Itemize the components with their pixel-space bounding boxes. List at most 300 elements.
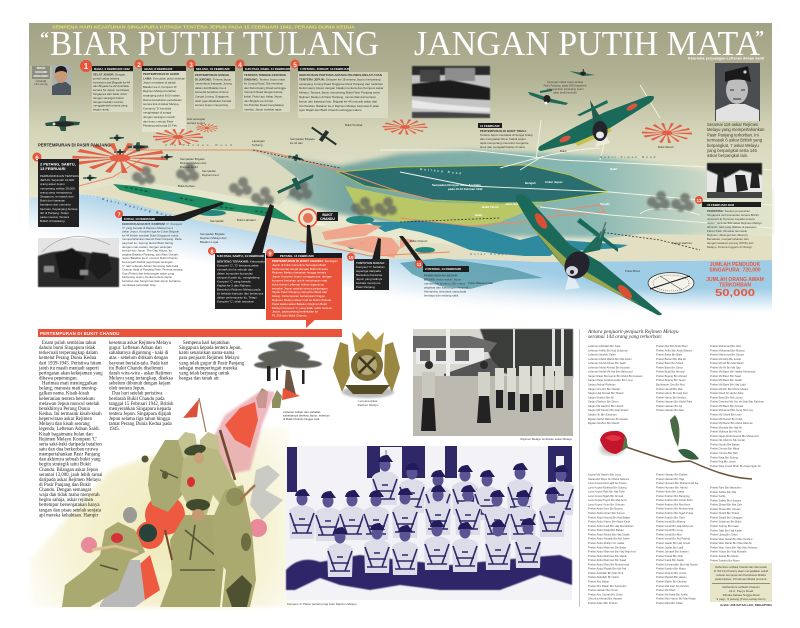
timeline 7 with leader: 'C' dari Leftenan Adnan Sempang hala bukit	[122, 264, 178, 268]
timeline 5: TENTERA JEPUN:	[299, 77, 325, 81]
map labels: Bukit Chandu	[410, 239, 428, 243]
timeline 9: Pada waktu askar Batalion Rejimen Bukit	[272, 302, 327, 306]
timeline 1: bersekutu dari Brigade ke-44	[93, 80, 131, 84]
timeline 6: PERBANDINGAN TENTERA	[40, 174, 79, 178]
timeline 10: Bersekutu bersama	[356, 273, 382, 277]
names column 3 upper: Prebet Md Din Bin Mohd Shukor	[710, 387, 749, 391]
names column 3 upper: Prebet Md Adip Bin Ismail	[710, 357, 741, 361]
article column 1: di Pasir Panjang dan Bukit	[39, 483, 91, 488]
article column 1: seramai 13,000, jauh lebih ramai	[39, 473, 103, 478]
names column 2 upper: Prebet Basri Bin Sirrat	[656, 365, 683, 369]
memorial info box: Reflections at Bukit Chandu	[722, 585, 760, 589]
names column 3 lower: Prebet Safian Bin Mat	[710, 490, 736, 494]
byline: suhaimi@	[36, 80, 47, 83]
names column 2 lower: Prebet Ismail Bin Maeng	[656, 520, 686, 524]
11 Februari note: Tentera Jepun mendarat di Sungei Kranji	[480, 133, 533, 137]
names column 1 upper: Sarjan Haji Ahmad Bin Shaari	[588, 391, 624, 395]
11 Februari note: 11 FEBRUARI	[480, 124, 500, 128]
names column 1 lower: Prebet Hassan Bin Omar	[588, 588, 618, 592]
article column 2: sebelum dibunuh dengan kejam	[109, 382, 171, 387]
names column 2 lower: Prebet Ibrahim Bin Ngah Putap	[656, 511, 694, 515]
map labels: Kampung Pasir Panjang	[40, 192, 71, 196]
names column 3 upper: Prebet Muhamad Bin Idris	[710, 344, 742, 348]
list heading	[587, 329, 679, 340]
article column 1: mempertahankan Pasir Panjang	[39, 453, 101, 458]
timeline 3: bersedia bertahan di timur	[195, 90, 229, 94]
article column 1: kemelut Perang Dunia Kedua	[39, 356, 97, 361]
timeline 9: hilang. Pertempuran berlanjutan hingga	[272, 294, 325, 298]
pink blood band	[180, 390, 275, 480]
teal reclaimed area	[368, 220, 628, 256]
article column 2: itu Bukit Chandu diselimuti	[109, 366, 164, 371]
article column 1: tangan dan pisau setelah senjata	[39, 508, 102, 513]
names column 3 upper: Prebet Raja Ismail Shah Bin Haja Ngah Ali	[710, 464, 761, 468]
section header bar: PERTEMPURAN DI BUKIT CHANDU	[40, 331, 120, 336]
timeline 7 with leader: membawa pertandan Gap.	[122, 283, 156, 287]
article column 1: melawan Jepun muncul setelah	[39, 402, 100, 407]
11 Februari note: PERTEMPURAN DI BUKIT TIMAH:	[480, 129, 527, 133]
names column 3 lower: Prebet Ujang Bin Shari	[710, 533, 738, 537]
timeline 3: Tentera Jepun	[212, 77, 231, 81]
timeline 11: pegawai dan kakitangan Hospital	[424, 286, 468, 290]
article column 1: api mereka kehabisan. Hampir	[39, 513, 99, 518]
list heading: Antara penjuarit-penjuarit Rejimen Melayu	[587, 329, 679, 335]
map labels: ke-44 dan	[290, 141, 303, 145]
11 Februari note	[478, 123, 533, 149]
timeline 8 with leader: Kompeni 'C' yang berada	[217, 280, 251, 284]
names column 3 upper: Prebet Basri Bin Md Loman	[710, 395, 743, 399]
forest strip	[113, 184, 296, 222]
timeline 11: membunuh seramai 200 orang	[424, 282, 465, 286]
timeline 10: 10	[348, 255, 354, 260]
timeline 5: 1 PETANG, JUMAAT, 13 FEBRUARI	[300, 67, 350, 71]
names column 3 upper: Prebet Dzamlat Md Nor bin Haji Mat Rahman	[710, 400, 764, 404]
timeline 2: Ramai kedudukan pertahanan	[143, 98, 182, 102]
timeline 7 with leader: Chandu tiada di Panjang Pasir. Peninta senjata	[122, 268, 183, 272]
illustration: soldiers in battle	[62, 390, 283, 607]
timeline 3: tentera Jepun menyerang	[195, 103, 228, 107]
grey shadows	[100, 560, 145, 607]
timeline 6: 6	[35, 156, 39, 162]
timeline 5: 5	[293, 62, 297, 69]
article column 1: galkan nama. Kisah-kisah	[39, 392, 90, 397]
timeline 1	[80, 60, 133, 112]
timeline 8 with leader: 8	[210, 250, 214, 256]
article column 1: daripada askar Rejimen Melayu	[39, 478, 101, 483]
names column 2 upper: Prebet Abd Bin Abdul Rani	[656, 344, 688, 348]
memorial info box: Reflections at Bukit Chandu dan Memorials	[715, 565, 767, 569]
map labels: Bukit Kerbau	[178, 184, 195, 188]
panel: map background: Bengah	[525, 181, 536, 185]
names column 3 upper: Prebet Md Sharif Bin Lean	[710, 412, 742, 416]
Adnan caption: Pasir Panjang terkorban. Ini	[707, 132, 759, 137]
plane: medium	[528, 90, 568, 105]
timeline 4: Ulu Pandan Road menghalang	[244, 103, 284, 107]
names column 3 upper: Prebet Puji Bin Jusoh	[710, 460, 736, 464]
map labels	[40, 117, 692, 285]
names column 2 lower: Prebet Ismail Bin Long	[656, 528, 684, 532]
section header bar	[38, 329, 342, 337]
parade caption: Rejimen Melayu lembaran askar Melayu	[520, 437, 572, 441]
timeline 10: Jepun yang tadinya	[356, 277, 382, 281]
timeline 2: dengan serangan musuh	[143, 115, 175, 119]
names column 2 upper: Prebet Bahari Bin Mat Ali	[656, 357, 686, 361]
timeline 6	[32, 152, 79, 227]
names column 2 lower: Prebet Jaafar Bin Latiff	[656, 545, 684, 549]
names column 2 lower: Prebet Mazlah Bin Hasan	[656, 575, 687, 579]
timeline 9: PERTEMPURAN DI BUKIT CHANDU:	[272, 259, 324, 263]
article column 2: menyerahkan Singapura kepada	[109, 407, 172, 412]
timeline 7 with leader: 7	[117, 212, 121, 218]
timeline 7 with leader: bertumpah ditebat juga Kapal serangan.	[122, 260, 174, 264]
names column 2 upper: Prebet Hassan Bin Aji	[656, 404, 682, 408]
article column 1: waja dan tidak mahu menyerah	[39, 493, 100, 498]
panel: map background: Kawasan	[312, 222, 325, 226]
timeline 7 with leader: ke-44 British terpisah Bukit Singapore untuk	[122, 233, 179, 237]
names column 3 upper: Prebet Md Basri Bin Haidar Mohamad	[710, 370, 756, 374]
photo: troops marching	[412, 66, 490, 118]
timeline 8 with leader: Kompeni 'C', 'D' bersama askar	[217, 264, 259, 268]
timeline 12: Melayu, Tentera Inggeris di Changi.	[707, 245, 753, 249]
map labels: Lapangan	[252, 139, 265, 143]
badge caption	[358, 399, 379, 407]
timeline 8 with leader: sampai di pasir itu, menghalang	[217, 276, 260, 280]
names column 3 lower: Prebet Zainal Bin Manis	[710, 554, 739, 558]
timeline 4	[236, 60, 290, 112]
timeline 9: Jepun di bukit menerima Serangan Bukit	[272, 263, 326, 267]
timeline 4: kebal. Pukul api, Askar Jepun	[244, 94, 282, 98]
map labels: Bukit	[560, 149, 567, 153]
names column 1 upper: Sarjan Mejar Bunyamin Bin Abdul Bin Hassan	[588, 374, 643, 378]
panel: map background: Bukit	[610, 167, 617, 171]
article column 2: gugur. Leftenan Adnan dan	[109, 346, 162, 351]
names column 3 upper: Prebet Md Basri Bin Haji Lajid	[710, 383, 746, 387]
timeline 3: SELASA, 10 FEBRUARI	[196, 67, 230, 71]
badge caption: Lencana Askar	[358, 399, 378, 403]
timeline 4: 4	[238, 62, 242, 69]
timeline 12: dengan tawanan perang (POW) dari	[707, 241, 754, 245]
timeline 6: orang askar Jepun	[40, 182, 65, 186]
timeline 11: Alexandra, termasuk yang tiada	[424, 290, 467, 294]
timeline 9: PL 236 iaitu Bukit Chandu.	[272, 314, 308, 318]
title	[40, 24, 764, 63]
plane: small top	[569, 69, 595, 76]
byline	[30, 66, 52, 95]
timeline 7 with leader: mempertahankan daerah Pasir Panjang. Pada	[122, 237, 182, 241]
soldier left falling	[62, 507, 157, 607]
timeline 9: Jepun Kompeni Jepun menggempur, dengan	[272, 275, 332, 279]
timeline 12: Singapura oleh komander tentera British	[707, 213, 759, 217]
names column 1 lower: Nasarudin Bujur bin Abdul Sabram	[588, 477, 630, 481]
names column 3 upper: Prebet Md Basri Bin Ahmad	[710, 404, 744, 408]
map labels: Sempadan	[202, 169, 216, 173]
names column 1 upper: Bgatan Ibrahim Bin Marah	[588, 421, 620, 425]
timeline 6: 13 FEBRUARI	[40, 166, 66, 171]
article column 3: Sempena hari kejatuhan	[183, 341, 230, 346]
second officer	[477, 361, 491, 423]
names column 1 lower: Prebet Abdul Hamid Bin Haji Baijan	[588, 515, 631, 519]
photo: prisoners	[707, 163, 762, 198]
timeline 5: kebun dan kawasan lain. Brigade ke-44 menarik askar dari	[299, 99, 377, 103]
timeline 4: mereka, Jepun melekat rapat	[244, 107, 282, 111]
timeline 7 with leader: berkurang Jepun, Kedua tentera Jepun	[122, 275, 173, 279]
middle row	[289, 485, 565, 541]
timeline 5: Melayu. Tentera Jepun menyerang Bukit Pasir Panjang serta	[299, 91, 380, 95]
timeline 5: Divisyen ke-18 tentera Jepun menyerang	[325, 77, 381, 81]
timeline 4: Tentera Jepun mara	[258, 77, 285, 81]
names column 3 upper: Prebet Raja Bin Sulong	[710, 455, 738, 459]
timeline 5: Rejimen Melayu di Pasir Panjang, menembak dari tempat	[299, 95, 376, 99]
timeline 1: Singapura dari Selat Johor	[93, 92, 127, 96]
Adnan caption: askar berpangkat lain.	[707, 153, 748, 158]
names column 2 lower: Prebet Jaafar Bin Haji Ismail	[656, 541, 690, 545]
title: JANGAN PUTIH MATA	[414, 24, 761, 63]
names column 3 upper: Prebet Nordin Bin Babas	[710, 442, 740, 446]
article column 1: belang, manusia mati mening-	[39, 387, 98, 392]
timeline 3: telah juga diletakkan berada	[195, 99, 232, 103]
timeline 11: 2 PETANG, 14 FEBRUARI	[425, 267, 461, 271]
map labels: Rejimen ke-2	[202, 173, 219, 177]
statistics: JUMLAH ORANG AWAM	[706, 277, 764, 283]
timeline 3	[186, 60, 235, 109]
front row	[327, 518, 541, 577]
timeline 7 with leader: pagi hari itu, Jepung lancar Bukit Sering	[122, 241, 173, 245]
list divider	[578, 329, 581, 607]
names column 2 lower: Prebet Ibrahim Bin Mat Amin	[656, 502, 691, 506]
article column 1: legenda, Leftenan Adnan Saidi.	[39, 427, 100, 432]
Adnan caption: yang berpangkat serta 146	[707, 148, 757, 153]
timeline 5	[290, 60, 388, 118]
article column 1: peringatan akan kekejaman yang	[39, 371, 103, 376]
timeline 8 with leader: BENTENG TERAKHIR:	[217, 260, 249, 264]
plane note: jalan bedil bersedia	[552, 90, 577, 94]
names column 2 lower: Prebet Hassan Bin Taja	[656, 477, 685, 481]
names column 2 upper: Prebet Bujal Bin Ahmad	[656, 370, 685, 374]
names column 1 upper: Sarjan Mejar Asrahamuddin Bin Long	[588, 378, 633, 382]
timeline 8 with leader: Kebanyakan	[249, 260, 267, 264]
timeline 1: begitu ramai.	[93, 108, 110, 112]
plane note: Pasir Panjang, pada 1000 kapaltera	[544, 84, 587, 88]
sub-headline: SEMPENA HARI KEJATUHAN SINGAPURA KEPADA TENTERA JEPUN PADA 15 FEBRUARI 1942, PERANG DUNIA KEDUA	[52, 24, 356, 30]
timeline 1: dengan serangan hebat	[93, 96, 124, 100]
title: ”	[755, 27, 764, 47]
names column 1 upper: Sarjan Md Hashim Bin Hamid	[588, 404, 624, 408]
article column 3: yang telah berjuang untuk	[179, 371, 230, 376]
statistics: TERKORBAN	[719, 282, 751, 288]
timeline 9: Jepun, pada petang berkekalan ke	[272, 310, 318, 314]
names column 1 upper: Leftenan Ariffin Bin Haji Sulaiman	[588, 348, 628, 352]
map labels: Sempadan Brigade	[180, 157, 205, 161]
article column 1: jatuh itu masih menjadi seperti	[38, 366, 99, 371]
timeline 12: Farrer Park. 60 askar termasuk	[707, 229, 748, 233]
names column 1 lower: Prebet Abdullah Bin Mat Omit	[588, 571, 624, 575]
article column 2: Dua hari setelah peristiwa	[112, 392, 163, 397]
article column 2: bayonet bertalu-talu. Pada hari	[109, 361, 169, 366]
timeline 4: Clementi Road dengan kereta	[244, 90, 283, 94]
map labels: Batalion Loyal	[200, 240, 219, 244]
timeline 6: bantahan dan meminta	[40, 203, 71, 207]
names column 2 lower: Prebet Mirat Bin Sidek	[656, 601, 683, 605]
article column 1: Rejimen Melayu Kompeni 'C'	[39, 437, 97, 442]
timeline 10: TUNTUTAN DARAH:	[356, 261, 385, 265]
names column 2 lower: Prebet Maleh Bin Othman	[656, 580, 687, 584]
rank of soldiers	[495, 366, 564, 394]
smoke clouds	[132, 163, 694, 216]
names column 2 lower: Prebet Md Shah	[656, 588, 676, 592]
plane note: menumpukan sepanjang pukul	[547, 87, 584, 91]
timeline 1: Dengan	[114, 72, 126, 76]
names column 2 lower: Prebet Jamaah Bin Ibrahim	[656, 550, 689, 554]
panel: map background: Jalan Bukit	[505, 202, 520, 206]
article column 3: bangsa dan tanah air.	[179, 376, 220, 381]
names column 2 upper: Prebet Bujang Bin Ahmad	[656, 374, 687, 378]
article column 1: dari 1939-1945. Peristiwa hitam	[39, 361, 102, 366]
names column 2 lower: Prebet Husin Bin Jaafar	[656, 490, 684, 494]
panel: map background: Holland Road	[420, 167, 463, 176]
timeline 8 with leader: 8.30 PAGI, SABTU, 14 FEBRUARI	[217, 254, 264, 258]
map labels: Rejimen Melayu dan	[180, 161, 207, 165]
timeline 3: dalam dari Batalion ke-2	[195, 86, 227, 90]
names column 3 lower: Prebet Sahip	[710, 494, 726, 498]
names column 2 upper: Prebet Hassan Bin Mat	[656, 408, 684, 412]
timeline 11: PEMBUNUHAN BESAR-	[424, 274, 458, 278]
timeline 6: orang yang mengepung	[40, 190, 72, 194]
panel: map background: Pasir Panjang Road	[102, 197, 174, 219]
timeline 2: Batalion ke-2, Kompeni 'D'	[143, 85, 177, 89]
map labels: Tanjong	[593, 233, 604, 237]
source credit: Grafik: ANUAR SALLEH, SINGAPURA	[720, 603, 773, 607]
names column 1 lower: Prebet Abu Samah Bin Omar	[588, 592, 623, 596]
back row	[372, 455, 574, 520]
soldier front	[160, 499, 225, 607]
timeline 1: 1	[84, 62, 89, 71]
timeline 2: dari timur, menuju Pasir	[143, 119, 173, 123]
names column 2 lower: Prebet Mior Harun Bin Mat Rejab	[656, 597, 696, 601]
names column 1 lower: Prebet Abdul Aziz Bin Bopeni	[588, 507, 623, 511]
article column 1: Kedua. Ini termasuk kisah-kisah	[39, 412, 102, 417]
timeline 10: berkata menuju ke	[356, 281, 381, 285]
timeline 4: 8.30 PAGI, RABU, 11 FEBRUARI	[245, 67, 290, 71]
group caption: Kompeni 'A' Platun pertama tiga suku Rejimen Melayu	[287, 602, 357, 606]
names column 2 lower: Prebet Hussain Bin Hamid	[656, 485, 688, 489]
statistics: 50,000	[715, 288, 756, 299]
timeline 1: dengan bedilan meriam,	[93, 100, 124, 104]
timeline 11: Askar-askar Jepun	[436, 278, 462, 282]
plane: large upper	[538, 96, 654, 151]
timeline 2: tentera kita di Askar Melayu,	[143, 102, 180, 106]
map labels: Bukit Merah	[658, 145, 674, 149]
names column 1 upper: Sarjan Ibrahim Bin Ali	[588, 395, 614, 399]
names column 1 lower: Prebet Abdullah Bin Salim	[588, 575, 620, 579]
names column 1 lower: Kopral Md Nasirin Bin Long	[588, 472, 621, 476]
statistics: SINGAPURA: 720,000	[709, 268, 761, 274]
timeline 9: Melayu Kompeni 'C' yang tidak mahu tentera	[272, 306, 332, 310]
names column 1 lower: Prebet Abdul Rahman Bin Saad	[588, 558, 626, 562]
timeline 2: Panjang pada pagi 10 Feb.	[143, 124, 178, 128]
soldiers illustration background glow	[30, 425, 295, 607]
names column 2 lower: Prebet Ibrahim Bin Muhammad	[656, 507, 694, 511]
timeline 2: Komando 'D' bersedia	[143, 106, 172, 110]
red splatter	[133, 402, 258, 600]
names column 3 upper: Prebet Ngah Abdul Hamid Bin Mohamed	[710, 434, 759, 438]
article column 3: para penjuarit Rejimen Melayu	[179, 356, 240, 361]
salmon advance zones	[322, 224, 415, 258]
timeline 7 with leader: 'C' yang berada di Rejimen Melayu ke-1	[122, 226, 173, 230]
names column 3 lower: Prebet Rani Bin Mantuhim	[710, 486, 742, 490]
article column 1: begitu sahaja, askar rejimen	[39, 498, 94, 503]
timeline 1: menggeledah tentera yang	[93, 104, 128, 108]
island south	[400, 258, 543, 289]
names column 3 upper: Prebet Mustafa Bin Haji Ali	[710, 425, 742, 429]
article column 1: satu dan dua berkorban nyawa	[39, 447, 99, 452]
timeline 12: Bersekutu, menjadi tahanan dan	[707, 237, 749, 241]
timeline 6: Singapura, termasuk dari	[40, 194, 74, 198]
article column 2: tentera Jepun. Singapura dijajah	[109, 412, 172, 417]
soldier centre with rifle	[180, 430, 240, 520]
timeline 12: Jepun, seramai 500 askar Rejimen Melayu	[707, 221, 762, 225]
timeline 8 with leader: dalam pertempuran itu. Tetapi	[217, 296, 257, 300]
map labels: tentera Jepun	[187, 121, 205, 125]
map labels: Rejimen Melayu dan	[200, 236, 227, 240]
names column 1 lower: Prebet Abdul Karim Bin Abdul Kadir	[588, 520, 630, 524]
Adnan caption: berpangkat, 7 askar Melayu	[707, 143, 759, 148]
timeline 8 with leader: Bersekutu Rejimen Melayu pada	[217, 288, 261, 292]
names column 2 lower: Prebet Kasak Bin Chik	[656, 554, 684, 558]
article column 1: serta saki-baki daripada batalion	[39, 442, 102, 447]
timeline 7 with leader: askar Jepun, Kompeni tiga ke-2 dan Brigade	[122, 230, 179, 234]
timeline 9: semakin Jepun setelah semua pejuangan.	[272, 286, 328, 290]
names column 3 upper: Prebet Md Nazeri Bin Ariah	[710, 417, 743, 421]
article column 1: Melayu dan kisah seorang	[39, 422, 90, 427]
rose	[600, 415, 752, 479]
timeline 1: tentera Se Jepun membawa	[93, 88, 130, 92]
timeline 10: Kompeni 'C' bertahan	[356, 265, 385, 269]
author portrait	[52, 65, 71, 95]
names column 1 upper: Sarjan Che Din Bin Nawab	[588, 387, 620, 391]
timeline 5: KEDUDUKAN PERTAMA ANTARA PELINIES-MELAYU DAN	[299, 73, 382, 77]
names column 2 upper: Prebet Bujang Bin Taupir	[656, 378, 686, 382]
timeline 7 with leader: Jepun Batalion ke-2, muncul. Bukit Chandu	[122, 256, 178, 260]
names column 2 lower: Prebet Kassim Bin Mopa	[656, 567, 686, 571]
names column 2 upper: Prebet Hamdi Bin Man	[656, 387, 684, 391]
names column 1 lower: Prebet Abdul Razak Bin Md Pati	[588, 567, 627, 571]
names column 1 lower: Prebet Abdul Ghani Bin Samat	[588, 511, 625, 515]
names column 3 lower: Prebet Shairil Bin Shaari	[710, 511, 740, 515]
names column 1 lower: Prebet Abdul Rahman Bin Haji Haji Amir	[588, 550, 636, 554]
plane: large foreground	[516, 194, 662, 315]
timeline 5: Ayer Rajah dan Bukit Chandu sehingga malam.	[299, 108, 362, 112]
article column 1: Chandu. Dengan semangat	[39, 488, 92, 493]
small planes left	[45, 116, 304, 181]
names column 3 lower: Prebet Sulaiman Bin Bakri	[710, 520, 742, 524]
map labels: Pulau Blakang Mati	[468, 281, 493, 285]
names column 1 lower: Prebet Abdul Mutalib Bin Md Saleh	[588, 537, 630, 541]
names column 1 lower: Lans Kopral Tayeh Bin Mat Amin	[588, 498, 627, 502]
names column 3 upper: Prebet Daud bin abdul Zalip	[710, 391, 744, 395]
badge caption: Rejimen Melayu	[358, 403, 379, 407]
timeline 1: dan Brigade ke-22 Australia,	[93, 84, 130, 88]
timeline 7 with leader: 8 PAGI, 13 FEBRUARI	[124, 217, 155, 221]
timeline 7 with leader: 'C': Kompeni	[165, 222, 182, 226]
timeline 10: sepertiga daripada	[356, 269, 381, 273]
names column 1 lower: Prebet Abdul Rahman Bin Manik	[588, 554, 627, 558]
names column 2 lower: Prebet Kamaruddin Bin Haji Nordin	[656, 562, 698, 566]
timeline 2: AHAD, 8 FEBRUARI	[144, 67, 173, 71]
memorial info box: 31-K, Pepys Road	[729, 589, 753, 593]
rising sun bursts	[72, 119, 692, 173]
map labels: Sempadan Brigade	[200, 232, 225, 236]
timeline 2: Kemudian pukul serbuan	[152, 76, 185, 80]
